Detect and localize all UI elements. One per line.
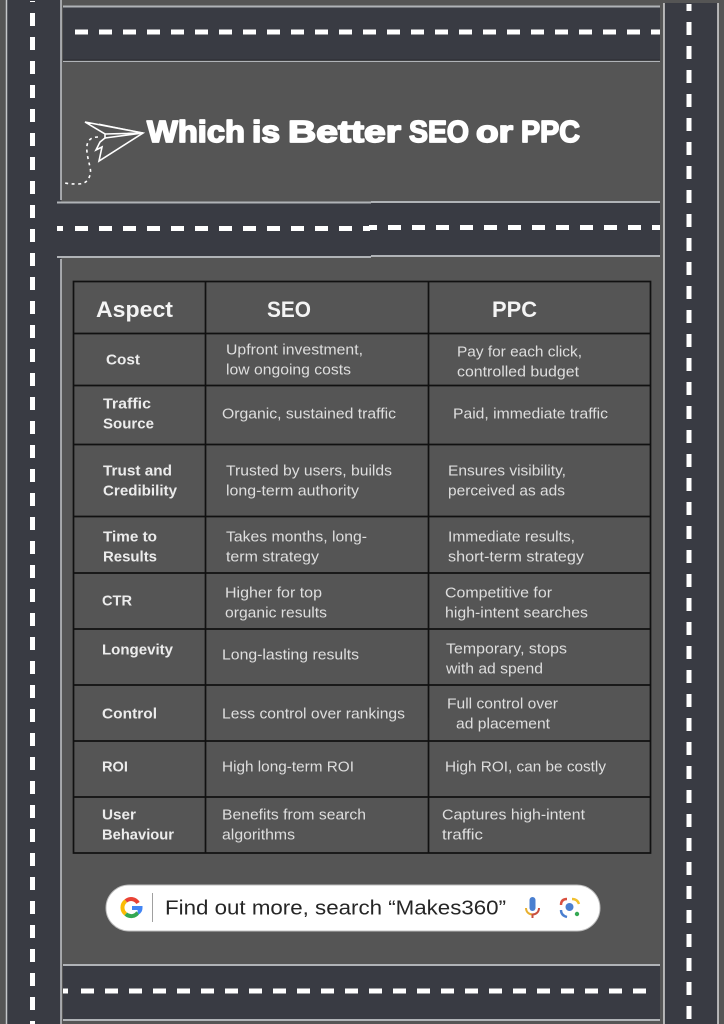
row: time to results: term strategy xyxy=(226,548,320,566)
row: CTR: Higher for top xyxy=(225,584,322,602)
row: longevity: with ad spend xyxy=(445,660,543,678)
row: user behaviour: Behaviour xyxy=(102,826,174,844)
title: is xyxy=(252,114,280,149)
row: time to results: short-term strategy xyxy=(448,548,585,566)
row: user behaviour: User xyxy=(102,806,136,824)
row: cost: Pay for each click, xyxy=(457,344,582,360)
row: trust and credibility: Ensures visibility, xyxy=(448,462,566,480)
row: time to results: Time to xyxy=(103,528,157,546)
row: user behaviour: algorithms xyxy=(222,826,295,844)
title: Which xyxy=(147,114,245,149)
row: longevity: Longevity xyxy=(102,642,174,658)
row: longevity: Long-lasting results xyxy=(222,646,359,664)
table header: SEO xyxy=(267,297,311,322)
row: control xyxy=(102,696,558,732)
row: trust and credibility: perceived as ads xyxy=(448,482,565,500)
icon: microphone xyxy=(526,897,539,918)
search text: Find out more, search “Makes360” xyxy=(165,896,506,920)
row: cost xyxy=(106,342,582,380)
row: longevity xyxy=(102,640,567,678)
row: ROI xyxy=(102,758,606,776)
row: CTR xyxy=(102,584,588,622)
icon: paper plane with dotted trail xyxy=(65,122,143,184)
title: or xyxy=(476,114,513,149)
row: trust and credibility: long-term authority xyxy=(226,482,360,500)
panel: title xyxy=(63,62,660,200)
row: CTR: high-intent searches xyxy=(445,604,588,622)
row: control: Less control over rankings xyxy=(222,706,405,722)
row: cost: low ongoing costs xyxy=(226,362,351,378)
row: CTR: Competitive for xyxy=(445,584,552,602)
title: Better xyxy=(288,114,401,149)
row: ROI: ROI xyxy=(102,758,128,776)
title xyxy=(147,114,580,149)
road: right vertical xyxy=(664,3,718,1024)
road: left vertical xyxy=(6,0,61,1024)
road: middle horizontal xyxy=(57,202,660,257)
row: cost: controlled budget xyxy=(457,364,580,380)
icon: Google G xyxy=(122,899,140,916)
row: time to results: Immediate results, xyxy=(448,528,575,546)
road: bottom horizontal xyxy=(63,965,660,1020)
table header xyxy=(96,297,537,322)
row: user behaviour: Benefits from search xyxy=(222,806,366,824)
row: time to results: Takes months, long- xyxy=(226,528,367,546)
row: CTR: CTR xyxy=(102,592,132,610)
row: trust and credibility xyxy=(103,462,566,500)
row: control: Full control over xyxy=(447,696,558,712)
row: traffic source xyxy=(103,396,609,432)
table header: PPC xyxy=(492,297,537,322)
title: PPC xyxy=(521,114,580,149)
row: trust and credibility: Trust and xyxy=(103,462,172,480)
row: time to results: Results xyxy=(103,548,157,566)
table grid xyxy=(73,281,651,853)
row: ROI: High ROI, can be costly xyxy=(445,758,606,776)
row: trust and credibility: Trusted by users, builds xyxy=(226,462,392,480)
title: SEO xyxy=(409,114,469,149)
row: trust and credibility: Credibility xyxy=(103,482,178,500)
row: CTR: organic results xyxy=(225,604,327,622)
row: traffic source: Traffic xyxy=(103,396,151,412)
icon: Google lens xyxy=(561,899,579,917)
row: time to results xyxy=(103,528,585,566)
row: user behaviour: traffic xyxy=(442,826,484,844)
row: user behaviour: Captures high-intent xyxy=(442,806,586,824)
row: ROI: High long-term ROI xyxy=(222,758,354,776)
row: control: Control xyxy=(102,706,157,722)
search bar callout xyxy=(106,885,600,931)
row: traffic source: Source xyxy=(103,416,154,432)
table header: Aspect xyxy=(96,297,174,322)
road: top horizontal xyxy=(63,6,660,62)
row: traffic source: Paid, immediate traffic xyxy=(453,406,609,422)
row: user behaviour xyxy=(102,806,586,844)
panel: comparison table xyxy=(73,281,651,853)
row: traffic source: Organic, sustained traffic xyxy=(222,406,397,422)
row: longevity: Temporary, stops xyxy=(446,640,567,658)
row: cost: Cost xyxy=(106,352,140,368)
row: control: ad placement xyxy=(456,716,551,732)
row: cost: Upfront investment, xyxy=(226,342,363,358)
